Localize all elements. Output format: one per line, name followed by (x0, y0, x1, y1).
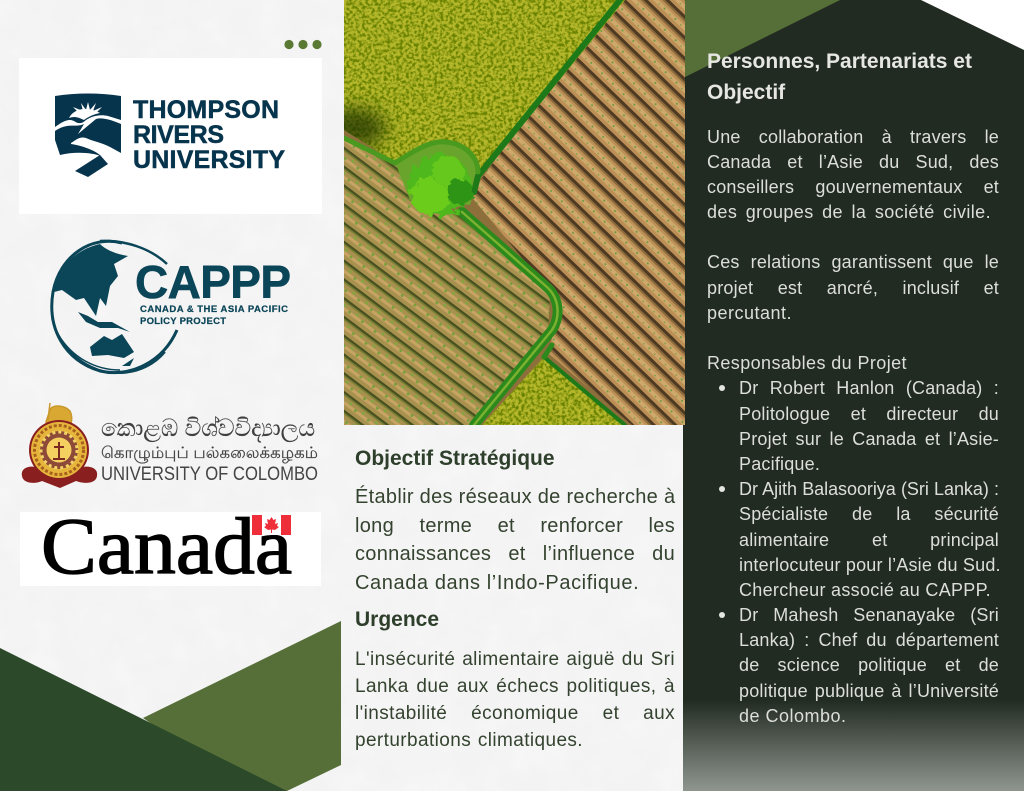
panel: right dark background (683, 0, 1024, 791)
list item: Dr Ajith Balasooriya: Spécialiste de la sécurité (739, 504, 999, 524)
list item: Dr Mahesh Senanayake: de Colombo. (739, 706, 847, 726)
logo: CAPPP globe (52, 241, 291, 373)
text block: Objectif Stratégique heading: Objectif Stratégique (355, 447, 555, 470)
list item: Dr Ajith Balasooriya: interlocuteur pour l’Asie du Sud. (739, 555, 1001, 575)
heading: Personnes, Partenariats et Objectif (707, 50, 972, 104)
text block: Responsables du Projet: Responsables du Projet (707, 353, 907, 373)
icon: green tree (409, 154, 473, 216)
field: bottom crop (482, 359, 622, 425)
image: aerial view of farm fields (318, 0, 685, 430)
field: yellow-green crop (344, 0, 625, 168)
text block: relations: Ces relations garantissent que le (707, 252, 999, 272)
logo: University of Colombo: UNIVERSITY OF COLOMBO (101, 464, 318, 485)
path: green field borders (344, 0, 625, 425)
text block: Urgence body: l'instabilité économique et aux (355, 703, 675, 724)
heading: Personnes, Partenariats et Objectif: Objectif (707, 81, 785, 104)
list item: Dr Robert Hanlon (719, 378, 999, 474)
field: right furrows (470, 0, 685, 425)
text block: collaboration: des groupes de la société civile. (707, 202, 991, 222)
text block: collaboration: Canada et l’Asie du Sud, des (707, 152, 999, 172)
list item: Dr Mahesh Senanayake: Dr Mahesh Senanayake (Sri (739, 605, 999, 625)
text block: relations (707, 252, 999, 323)
text block: Urgence heading: Urgence (355, 608, 439, 631)
text block: Urgence body: L'insécurité alimentaire aiguë du Sri (355, 649, 675, 670)
list item: Dr Ajith Balasooriya: alimentaire et principal (739, 530, 999, 550)
list item: Dr Robert Hanlon: Projet sur le Canada et l’Asie- (739, 429, 999, 449)
shape: left dark green triangle (0, 648, 287, 791)
text block: relations: projet est ancré, inclusif et (707, 278, 999, 298)
text block: Urgence body: perturbations climatiques. (355, 730, 583, 751)
list item: Dr Ajith Balasooriya: Dr Ajith Balasooriya (Sri Lanka) : (739, 479, 999, 499)
text block: Objectif Stratégique body: connaissances et l’influence du (355, 543, 675, 565)
logo: Thompson Rivers University: UNIVERSITY (133, 146, 285, 174)
text block: Objectif Stratégique body (355, 485, 676, 594)
text block: Objectif Stratégique body: Établir des réseaux de recherche à (355, 486, 675, 508)
list item: Dr Robert Hanlon: Pacifique. (739, 454, 820, 474)
text block: Objectif Stratégique body: long terme et renforcer les (355, 515, 675, 537)
list item: Dr Ajith Balasooriya (719, 479, 1001, 600)
list item: Dr Mahesh Senanayake (719, 605, 999, 726)
logo: University of Colombo (22, 403, 318, 488)
logo: Canada wordmark: Canada (41, 503, 292, 591)
list item: Dr Mahesh Senanayake: Lanka) : Chef du département (739, 630, 999, 650)
logo: Thompson Rivers University: RIVERS (133, 121, 224, 149)
logo: Thompson Rivers University (19, 58, 322, 214)
text block: Objectif Stratégique body: Canada dans l’Indo-Pacifique. (355, 572, 639, 594)
list item: Dr Robert Hanlon: Politologue et directeur du (739, 404, 999, 424)
logo: CAPPP globe: CANADA & THE ASIA PACIFIC (140, 304, 288, 315)
list item: Dr Ajith Balasooriya: Chercheur associé au CAPPP. (739, 580, 991, 600)
list item: Dr Mahesh Senanayake: politique publique à l’Université (739, 681, 999, 701)
shape: left olive triangle (143, 621, 341, 791)
icon: TRU shield (55, 94, 121, 177)
list item: Dr Robert Hanlon: Dr Robert Hanlon (Canada) : (739, 378, 999, 398)
decorative dots (284, 40, 322, 49)
text block: collaboration (707, 127, 999, 222)
heading: Personnes, Partenariats et Objectif: Personnes, Partenariats et (707, 50, 972, 73)
text block: Urgence body: Lanka due aux échecs politiques, à (355, 676, 675, 697)
logo: University of Colombo: කොළඹ විශ්වවිද්‍යාලය (101, 415, 315, 443)
icon: Canadian flag (252, 515, 291, 535)
icon: brushed globe (52, 241, 177, 373)
logo: University of Colombo: கொழும்புப் பல்கலைக்கழகம் (101, 445, 318, 463)
text block: collaboration: Une collaboration à travers le (707, 127, 999, 147)
field: left furrows (344, 140, 550, 425)
logo: CAPPP globe: POLICY PROJECT (140, 316, 226, 327)
text block: Urgence body (355, 649, 675, 751)
text block: relations: percutant. (707, 303, 792, 323)
text block: Responsables du Projet (707, 353, 1001, 726)
logo: Thompson Rivers University: THOMPSON (133, 96, 279, 124)
icon: Colombo crest (22, 403, 97, 488)
text block: collaboration: conseillers gouvernementaux et (707, 177, 999, 197)
logo: CAPPP globe: CAPPP (135, 256, 291, 308)
list item: Dr Mahesh Senanayake: de science politique et de (739, 655, 999, 675)
grass around tree (395, 141, 478, 205)
